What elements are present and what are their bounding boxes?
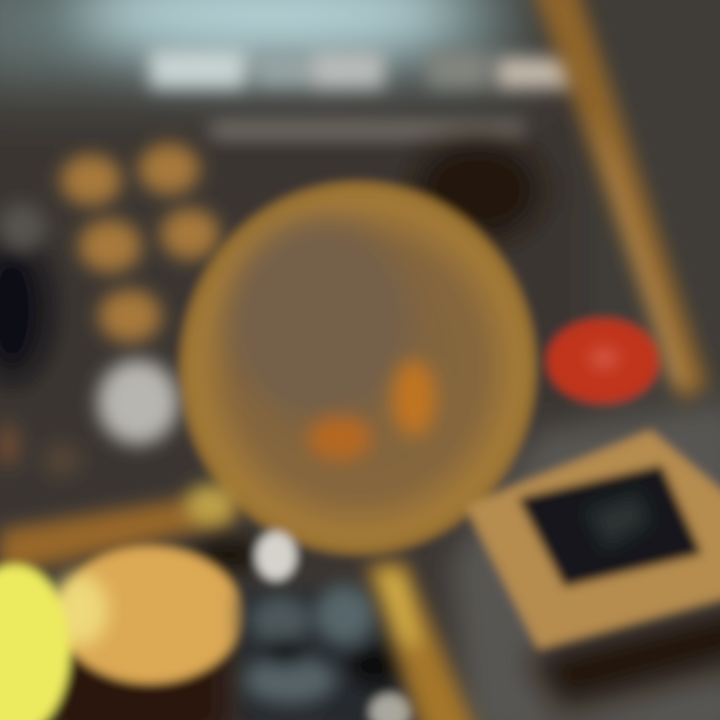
gold bar tip highlight [186,485,234,525]
coin pale highlight [52,574,108,646]
frame shadow [530,600,720,710]
left dark object [0,240,48,380]
title band [150,50,577,140]
coin body [180,182,536,554]
left grey highlight [0,204,46,252]
red button [547,319,659,403]
dark gap [194,539,262,571]
frame inner sheen [585,492,650,550]
coin 3 [79,220,141,272]
pile shadow [40,640,230,720]
coin 5 [99,290,161,342]
yellow bright coin [0,565,70,720]
large central gold coin [180,182,536,554]
coin orange symbol [308,360,436,460]
title: blurred heading letter masses [150,50,577,88]
subtitle: blurred line of small text [210,120,524,140]
square gold frame [470,434,720,710]
white stone bottom [370,694,410,720]
background: lower right grey surface [450,400,720,720]
small gold coins [61,144,219,342]
background: top sky glow [0,0,520,85]
coin 4 [161,209,219,259]
white stone top [256,532,296,580]
frame body [470,434,720,645]
coin 1 [61,155,121,205]
highlight on red button [590,349,618,367]
coin inner shading [230,220,410,420]
gold diagonal rod, upper right [530,0,708,402]
faint copper dots [0,423,80,476]
coin 2 [139,144,199,194]
dark gem cluster bottom centre [240,532,410,720]
front gold coin [58,547,242,683]
gold handle bottom [366,560,480,720]
gold bar left [0,492,235,575]
frame inner black [522,468,698,584]
dark orb behind coin [414,140,542,240]
coin pile lower left [0,485,262,720]
background: right dark panel [590,0,720,420]
silver coin [98,360,178,444]
